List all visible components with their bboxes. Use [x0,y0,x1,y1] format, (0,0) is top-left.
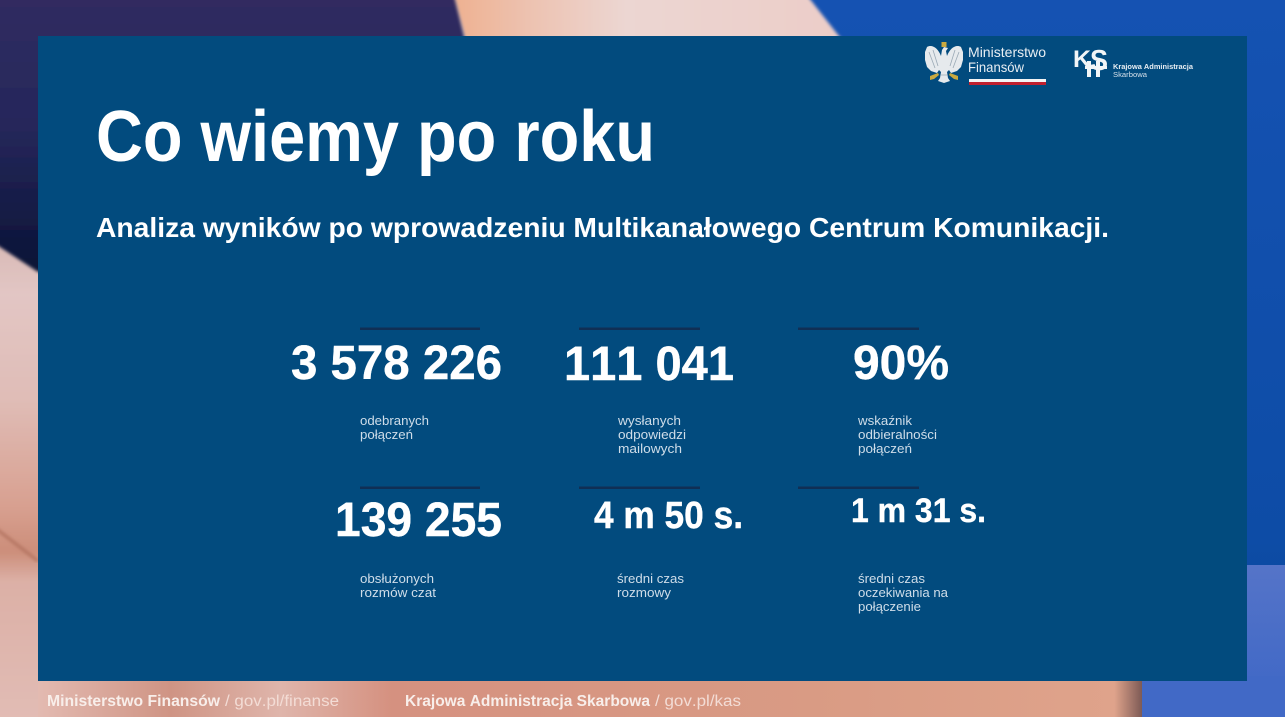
title: Co wiemy po roku [96,97,655,177]
icon: KAS mark: S [1090,45,1108,77]
stat: odebranych połączeń: 3 578 226 [291,337,502,390]
stat: wysłanych odpowiedzi mailowych: wysłanych [617,414,681,428]
icon: KAS mark [1073,45,1108,77]
subtitle: Analiza wyników po wprowadzeniu Multikanałowego Centrum Komunikacji. [96,212,1109,243]
footer: Ministerstwo Finansów: Ministerstwo Finansów [47,693,221,710]
logo: Ministerstwo Finansów [925,42,1046,85]
stat: odebranych połączeń: odebranych [360,414,429,428]
stat: wskaźnik odbieralności połączeń: odbieralności [858,428,937,442]
stat: średni czas oczekiwania na połączenie: średni czas [858,572,925,586]
stat: wysłanych odpowiedzi mailowych: mailowych [618,442,682,456]
stat: wskaźnik odbieralności połączeń: wskaźnik [857,414,913,428]
footer: Krajowa Administracja Skarbowa: / gov.pl/kas [655,693,741,710]
stat: średni czas oczekiwania na połączenie: oczekiwania na [858,586,948,600]
stat: obsłużonych rozmów czat: 139 255 [335,494,502,547]
logo: Krajowa Administracja Skarbowa: Skarbowa [1113,72,1147,79]
logo wordmark: Ministerstwo [968,44,1046,60]
logo: Ministerstwo Finansów: Finansów [968,59,1025,75]
stat: średni czas oczekiwania na połączenie: 1 m 31 s. [851,492,986,530]
stat: średni czas rozmowy [579,486,743,600]
footer: Ministerstwo Finansów: / gov.pl/finanse [225,693,339,710]
stat: obsłużonych rozmów czat: obsłużonych [360,572,434,586]
stat: wysłanych odpowiedzi mailowych: 111 041 [564,338,734,391]
icon: white eagle [925,42,963,83]
stat: średni czas oczekiwania na połączenie [798,486,986,614]
stat: wysłanych odpowiedzi mailowych [564,328,734,456]
logo text: Krajowa Administracja [1113,64,1193,71]
stat: średni czas oczekiwania na połączenie: połączenie [858,600,921,614]
icon: KAS mark: K [1073,46,1092,73]
stat: obsłużonych rozmów czat [335,486,502,600]
footer: Ministerstwo Finansów [47,693,339,710]
stat: wskaźnik odbieralności połączeń: połączeń [858,442,912,456]
stat: średni czas rozmowy: 4 m 50 s. [594,495,743,537]
stat: średni czas rozmowy: rozmowy [617,586,672,600]
logo: Krajowa Administracja Skarbowa [1073,45,1193,79]
stat: wskaźnik odbieralności połączeń: 90% [853,337,949,390]
stat: odebranych połączeń [291,328,502,442]
stat: wskaźnik odbieralności połączeń [798,328,949,456]
stat: odebranych połączeń: połączeń [360,428,413,442]
stat: średni czas rozmowy: średni czas [617,572,684,586]
stat: obsłużonych rozmów czat: rozmów czat [360,586,437,600]
footer: Krajowa Administracja Skarbowa: Krajowa Administracja Skarbowa [405,693,650,710]
stat: wysłanych odpowiedzi mailowych: odpowiedzi [618,428,686,442]
